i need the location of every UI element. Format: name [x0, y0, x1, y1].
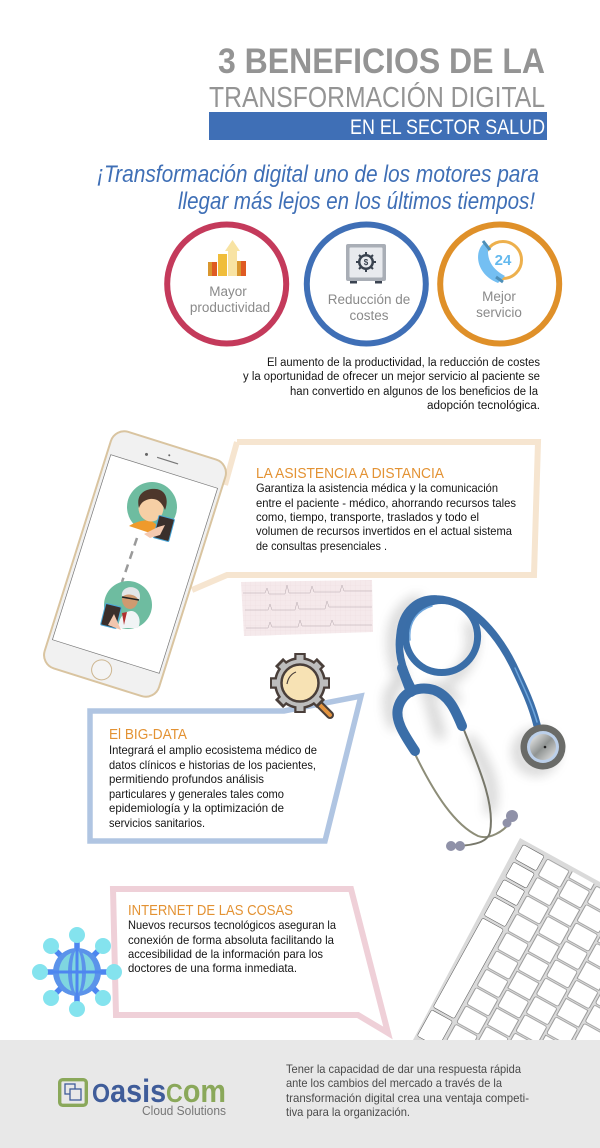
callout frame: [90, 696, 361, 841]
heading: El BIG-DATA: [109, 726, 187, 743]
phone body: [40, 428, 230, 700]
intro paragraph: El aumento de la productividad, la reducción de costes: [267, 357, 540, 369]
body text: [109, 743, 317, 830]
label: Mayor: [209, 284, 247, 299]
intro paragraph: adopción tecnológica.: [427, 400, 540, 412]
smartphone: [40, 428, 230, 700]
ecg strip: [241, 580, 373, 636]
keyboard photo: [413, 838, 600, 1048]
logo wordmark: Oasis Com: [92, 1073, 226, 1110]
stethoscope: [389, 599, 566, 851]
metal tubes: [415, 754, 511, 837]
title line 1: 3 BENEFICIOS DE LA: [218, 42, 545, 81]
label: costes: [349, 308, 389, 323]
body text: particulares y generales tales como: [109, 787, 284, 801]
tube loop: [406, 600, 478, 672]
icon: gear with magnifier: [270, 653, 330, 715]
body text: permitiendo profundos análisis: [109, 772, 264, 786]
closing text: [286, 1062, 529, 1119]
benefit circle: productividad: [167, 224, 286, 344]
body text: entre el paciente - médico, ahorrando recursos tales: [256, 496, 516, 510]
intro paragraph: han convertido en algunos de los beneficios de la: [290, 386, 539, 398]
body text: accesibilidad de la información para los: [128, 947, 323, 961]
body text: de consultas presenciales .: [256, 539, 387, 553]
benefit circle: costes: [307, 224, 426, 344]
callout frame: [192, 442, 538, 590]
tagline: llegar más lejos en los últimos tiempos!: [178, 188, 535, 215]
body text: [256, 481, 516, 553]
y-tube yoke: [397, 689, 462, 751]
ear tips: [446, 810, 518, 851]
body text: como, tiempo, transporte, traslados y todo el: [256, 510, 479, 524]
callout: internet de las cosas: [113, 889, 388, 1033]
closing text: Tener la capacidad de dar una respuesta rápida: [286, 1062, 521, 1076]
tagline: ¡Transformación digital uno de los motores para: [97, 161, 539, 188]
callout: big data: [90, 696, 361, 841]
closing text: tiva para la organización.: [286, 1105, 410, 1119]
body text: servicios sanitarios.: [109, 816, 205, 830]
closing text: ante los cambios del mercado a través de la: [286, 1076, 502, 1090]
logo mark: [60, 1080, 86, 1105]
body text: Integrará el amplio ecosistema médico de: [109, 743, 317, 757]
body text: epidemiología y la optimización de: [109, 801, 284, 815]
avatar: doctor: [101, 581, 152, 630]
body text: conexión de forma absoluta facilitando la: [128, 933, 334, 947]
logo: OasisCom: [60, 1073, 226, 1118]
chestpiece: [520, 724, 566, 770]
body text: volumen de recursos invertidos en el actual sistema: [256, 524, 512, 538]
label: Reducción de: [328, 292, 410, 307]
avatar: patient: [127, 482, 177, 542]
title banner text: EN EL SECTOR SALUD: [350, 116, 545, 139]
shadow: [389, 600, 554, 810]
heading: LA ASISTENCIA A DISTANCIA: [256, 465, 444, 482]
body text: datos clínicos e historias de los pacientes,: [109, 758, 316, 772]
body text: Nuevos recursos tecnológicos aseguran la: [128, 918, 336, 932]
icon: 24h phone: 24: [495, 252, 512, 269]
footer band: [0, 1040, 600, 1148]
label: servicio: [476, 305, 522, 320]
closing text: transformación digital crea una ventaja competi-: [286, 1091, 529, 1105]
long tube: [399, 599, 537, 725]
label: productividad: [190, 300, 270, 315]
icon: safe: $: [364, 258, 369, 267]
loop highlight: [410, 606, 432, 640]
body text: [128, 918, 336, 975]
body text: Garantiza la asistencia médica y la comunicación: [256, 481, 498, 495]
body text: doctores de una forma inmediata.: [128, 961, 297, 975]
dashed connector: [122, 538, 137, 582]
label: Mejor: [482, 289, 516, 304]
long tube highlight: [515, 668, 537, 722]
heading: INTERNET DE LAS COSAS: [128, 902, 293, 919]
callout frame: [113, 889, 388, 1033]
logo tagline: Cloud Solutions: [142, 1104, 226, 1118]
title block: [209, 42, 547, 140]
icon: network globe: [32, 927, 122, 1017]
callout: la asistencia a distancia: [192, 442, 538, 590]
icon: rising bars: [208, 240, 246, 276]
tagline: [97, 161, 539, 215]
intro paragraph: [243, 357, 540, 412]
title banner: [209, 112, 547, 140]
title line 2: TRANSFORMACIÓN DIGITAL: [209, 81, 545, 114]
benefit circle: servicio: [440, 224, 559, 344]
intro paragraph: y la oportunidad de ofrecer un mejor servicio al paciente se: [243, 371, 540, 383]
